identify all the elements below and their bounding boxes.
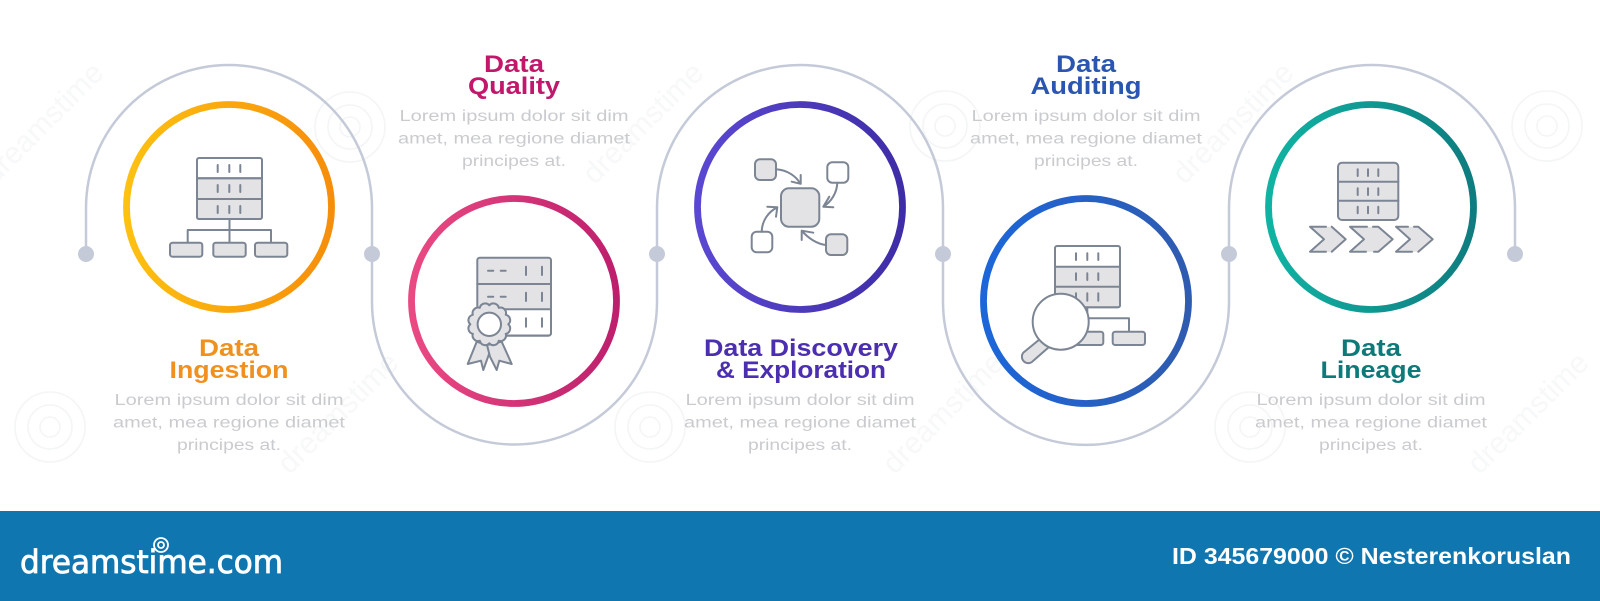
text block: quality description: amet, mea regione diamet: [398, 130, 631, 148]
icon: server with branching nodes: [170, 158, 287, 257]
panel: data quality: [398, 51, 631, 404]
watermark pattern: dreamstime: [576, 56, 710, 190]
icon: server with chevrons: [1310, 163, 1433, 252]
text block: ingestion description: amet, mea regione diamet: [113, 414, 346, 432]
watermark pattern: [0, 56, 1595, 480]
watermark pattern: dreamstime: [1166, 56, 1300, 190]
watermark pattern: dreamstime: [271, 346, 405, 480]
text block: ingestion description: Lorem ipsum dolor sit dim: [114, 392, 344, 409]
text block: lineage description: Lorem ipsum dolor sit dim: [1256, 392, 1486, 409]
panel: data ingestion: [113, 104, 346, 454]
icon: server with magnifier: [1022, 246, 1145, 363]
text block: ingestion description: [113, 392, 346, 454]
icon: logo swirl: [154, 538, 168, 552]
text block: discovery description: principes at.: [748, 437, 852, 454]
heading: data discovery: Data Discovery: [704, 335, 899, 362]
heading: data auditing: Data: [1056, 51, 1117, 78]
heading: data ingestion: Data: [199, 335, 260, 362]
text block: discovery description: amet, mea regione diamet: [684, 414, 917, 432]
text block: discovery description: Lorem ipsum dolor sit dim: [686, 392, 914, 409]
footer banner: [0, 511, 1600, 601]
heading line: lineage: Lineage: [1320, 357, 1422, 384]
text block: auditing description: Lorem ipsum dolor sit dim: [972, 108, 1200, 125]
logo text: dreamstime.com: [20, 543, 283, 581]
serpentine connector line with dots: [78, 65, 1523, 445]
text block: ingestion description: principes at.: [177, 437, 281, 454]
heading line: exploration: & Exploration: [716, 357, 886, 384]
panel: data discovery and exploration: [684, 104, 917, 454]
watermark pattern: dreamstime: [1461, 346, 1595, 480]
watermark pattern: dreamstime: [876, 346, 1010, 480]
text block: lineage description: amet, mea regione diamet: [1255, 414, 1488, 432]
text block: quality description: [398, 108, 631, 170]
text block: quality description: Lorem ipsum dolor sit dim: [400, 108, 628, 125]
heading line: ingestion: Ingestion: [170, 357, 288, 384]
ring: data quality: [412, 198, 616, 404]
panel: data lineage: [1255, 104, 1488, 454]
panel: data auditing: [970, 51, 1203, 404]
heading: data quality: Data: [484, 51, 545, 78]
ring: data ingestion: [126, 104, 332, 310]
heading line: auditing: Auditing: [1030, 73, 1142, 100]
image id and author credit: ID 345679000 © Nesterenkoruslan: [1172, 543, 1571, 569]
text block: auditing description: [970, 108, 1203, 170]
text block: lineage description: principes at.: [1319, 437, 1423, 454]
text block: quality description: principes at.: [462, 153, 566, 170]
icon: server with certificate badge: [468, 258, 551, 370]
text block: discovery description: [684, 392, 917, 454]
heading: data lineage: Data: [1341, 335, 1402, 362]
heading line: quality: Quality: [468, 73, 561, 100]
ring: data auditing: [984, 198, 1188, 404]
ring: data lineage: [1268, 104, 1474, 310]
text block: auditing description: principes at.: [1034, 153, 1138, 170]
ring: data discovery: [698, 104, 902, 310]
text block: auditing description: amet, mea regione diamet: [970, 130, 1203, 148]
icon: nodes with arrows pointing to centre: [752, 159, 848, 255]
text block: lineage description: [1255, 392, 1488, 454]
